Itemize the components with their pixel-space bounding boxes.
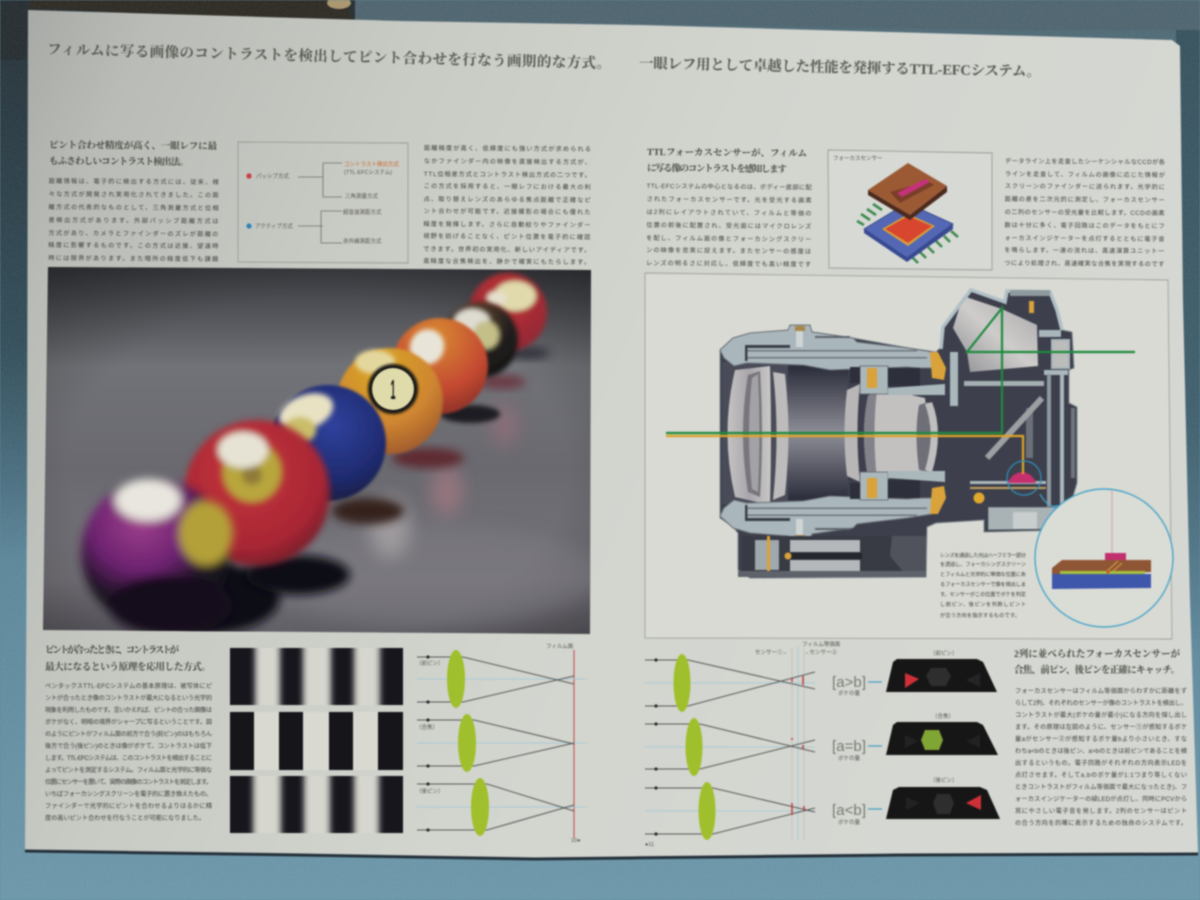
text block: lower left principle: します。TTL-EFCシステムは、このコントラストを検出することに <box>45 754 212 762</box>
chart: lens diagrams, film plane: 〔前ピン〕 <box>416 659 444 667</box>
detail connector line <box>1040 494 1074 535</box>
text block: lower right sensors: 合焦、前ピン、後ピンを正確にキャッチ。 <box>1014 664 1180 676</box>
camera and lens silhouette <box>720 290 1077 578</box>
panel: focus detection classification: コントラスト検出方式 <box>344 160 399 168</box>
caption <box>940 551 1027 619</box>
viewfinder row: back focus: [a<b] <box>832 802 866 819</box>
text block: lower left principle: いちばフォーカシングスクリーンを電子的に置き換えたもの。 <box>45 790 212 798</box>
text block: lower left principle: 現象を利用したものです。言いかえれば、ピントの合った画像は <box>45 706 212 714</box>
panel: focus sensor chip: フォーカスセンサー <box>833 155 883 162</box>
text block: lower right sensors: コントラストが最大(ボケの量が最小)になる方向を探し出し <box>1015 711 1187 719</box>
caption: が合う方向を指示するものです。 <box>940 611 1020 619</box>
text block: lower right sensors: ときコントラストがフィルム等価面で最大になったとき)、フ <box>1015 783 1187 791</box>
panel: focus sensor chip <box>828 150 992 270</box>
stripes: back focus, soft <box>229 775 404 834</box>
viewfinder row: back focus: 〔後ピン〕 <box>930 776 958 784</box>
text block: second column: TTL位相差方式とコントラスト検出方式の二つです。 <box>424 170 591 179</box>
text block: TTL focus sensor: は2列にレイアウトされていて、フィルムと等価の <box>646 208 812 217</box>
text block: lower right sensors <box>1014 648 1188 827</box>
text block: contrast detection intro: 時には限界があります。また暗所の精度低下も課題 <box>48 254 218 263</box>
caption: とフィルムと光学的に等価な位置にあ <box>940 570 1026 578</box>
text block: lower right sensors: ォーカスインジケーターの緑LEDが点灯し、同時にPCVから <box>1015 795 1187 803</box>
caption: るフォーカスセンサーで像を検出しま <box>940 580 1026 588</box>
text block: second column: 距離精度が高く、低輝度にも強い方式が求められる <box>424 144 591 153</box>
blue ball <box>270 385 386 501</box>
text block: TTL focus sensor: TTLフォーカスセンサーが、フィルム <box>647 147 807 159</box>
text block: lower right sensors: 耳にやさしい電子音を発します。2列のセンサーはピント <box>1015 807 1187 815</box>
text block: lower left principle: よってピントを測定するシステム。フィルム面と光学的に等価な <box>45 766 212 774</box>
text block: second column: 精度を発揮します。さらに自動絞りやファインダー <box>423 220 590 229</box>
black ball <box>442 302 518 378</box>
panel: focus detection classification: 三角測量方式 <box>345 192 379 200</box>
red ball <box>184 420 330 566</box>
chart: lens diagrams, two sensors: フィルム等価面 <box>802 640 841 648</box>
chart: lens diagrams, film plane: フィルム面 <box>546 643 574 650</box>
icon: brown cover chip <box>868 163 947 220</box>
text block: contrast detection intro <box>48 139 220 263</box>
text block: TTL focus sensor: 位置の前後に配置され、受光面にはマイクロレンズ <box>646 221 811 230</box>
yellow number one ball <box>337 348 443 454</box>
reflections and shadows <box>130 347 550 634</box>
text block: lower left principle: 位置にセンサーを置いて、実際の画像のコントラストを測定します。 <box>45 778 212 786</box>
icon: blue base chip with green pins <box>857 203 958 263</box>
red dot: passive <box>246 173 252 179</box>
text block: right column upper: 数は十分に多く、電子回路はこのデータをもとにフ <box>1005 221 1165 230</box>
text block: lower right sensors: フォーカスセンサーはフィルム等価面からわずかに距離をず <box>1015 687 1187 695</box>
text block: second column: ント合わせが可能です。近接撮影の場合にも優れた <box>424 207 591 216</box>
chart: lens diagrams, film plane: 〔合焦〕 <box>416 723 438 731</box>
lower lens barrel shell <box>720 471 946 541</box>
text block: second column: なかファインダー内の映像を直接検出する方式が、 <box>424 157 591 166</box>
text block: lower right sensors: 出するというもの。電子回路がそれぞれの方向表示LEDを <box>1015 759 1187 767</box>
chart: lens diagrams, film plane: 〔後ピン〕 <box>416 787 444 795</box>
text block: lower left principle: ピントが合ったときに、コントラストが <box>45 644 179 656</box>
viewfinder row: in focus: [a=b] <box>832 738 866 755</box>
chart: lens diagrams, two sensors <box>645 640 841 848</box>
upper lens barrel shell <box>720 325 946 395</box>
blue dot: active <box>246 223 252 229</box>
text block: right column upper: 距離の差を二次元的に測定し、フォーカスセンサー <box>1005 195 1165 204</box>
text block: second column: 高精度な合焦検出を、静かで確実にもたらします。 <box>423 257 590 266</box>
text block: TTL focus sensor: TTL-EFCシステムの中心となるのは、ボディー底部に配 <box>647 182 812 191</box>
magenta sensor <box>1008 472 1036 483</box>
chart: contrast stripes <box>229 647 404 834</box>
text block: TTL focus sensor: ンの映像を忠実に捉えます。またセンサーの感度は <box>646 246 811 255</box>
light path green <box>666 308 1135 433</box>
text block: right column upper: つにより処理され、高速確実な合焦を実現するのです <box>1004 259 1164 268</box>
text block: second column: 視野を妨げることなく、ピント位置を電子的に確認 <box>423 232 591 241</box>
yellow number one ball: 1 <box>390 374 396 405</box>
text block: lower right sensors: 量aがセンサー②が感知するボケ量bより小さいとき、すな <box>1015 735 1187 743</box>
light path orange <box>666 436 1023 474</box>
viewfinder row: front focus <box>832 649 997 697</box>
title <box>47 40 1041 80</box>
orange ball <box>392 318 488 414</box>
caption: を透過し、フォーカシングスクリーン <box>940 560 1026 568</box>
viewfinder row: front focus: [a>b] <box>832 674 866 691</box>
text block: right column upper: の二列のセンサーの受光量を比較します。CCDの画素 <box>1005 208 1165 217</box>
lens barrel tube <box>786 366 848 500</box>
text block: second column: 点、取り替えレンズのあらゆる焦点距離で正確なピ <box>424 195 591 204</box>
viewfinder row: front focus: 〔前ピン〕 <box>930 649 958 657</box>
text block: right column upper: を鳴らします。一連の流れは、高速演算ユニット一 <box>1004 246 1164 255</box>
viewfinder row: back focus <box>832 776 1000 826</box>
text block: contrast detection intro: 差検出方式があります。外部パッシブ距離方式は <box>48 216 219 225</box>
chart: lens diagrams, two sensors: ●11 <box>645 842 654 848</box>
viewfinder row: in focus: ボケの量 <box>838 754 861 762</box>
text block: lower right sensors: ます。その原理は左図のように、センサー①が感知するボケ <box>1015 723 1187 731</box>
text block: lower left principle: 後方で合う(後ピン)のときは像がボケて、コントラストは低下 <box>45 742 212 750</box>
text block: lower left principle: 度の高いピント合わせを行なうことが可能になりました。 <box>45 814 205 822</box>
text block: contrast detection intro: 方式があり、カメラとファインダーのズレが距離の <box>48 229 218 238</box>
chart: lens diagrams, two sensors: →センサー② <box>804 648 838 656</box>
dark objects behind the paper edges <box>0 0 1200 660</box>
text block: lower right sensors: らして2列、それぞれのセンサーが像のコントラストを検出し、 <box>1015 699 1187 707</box>
text block: lower left principle: ファインダーで光学的にピントを合わせるよりはるかに精 <box>45 802 212 810</box>
middle lens group <box>844 384 938 482</box>
text block: right column upper: スクリーンのファインダーに送られます。光学的に <box>1005 182 1165 191</box>
caption: す。センサーがこの位置でボケを判定 <box>940 590 1026 598</box>
panel: focus detection classification: (TTL-EFCシステム) <box>344 169 392 176</box>
chart: lens diagrams, two sensors: センサー①← <box>755 648 788 656</box>
text block: contrast detection intro: 離方式の代表的なものとして、三角測量方式と位相 <box>49 203 219 212</box>
text block: second column: この方式を採用すると、一眼レフにおける最大の利 <box>424 182 591 191</box>
text block: second column <box>423 144 592 266</box>
panel: focus detection classification <box>238 142 408 263</box>
viewfinder row: in focus: 〔合焦〕 <box>932 712 954 720</box>
panel: billiard balls photograph <box>40 262 600 637</box>
text block: TTL focus sensor: されたフォーカスセンサーです。光を受光する画素 <box>647 195 812 204</box>
stripes: front focus, soft <box>229 647 404 706</box>
chart: lens diagrams, film plane <box>416 643 587 844</box>
panel: focus detection classification: アクティブ方式 <box>255 222 293 230</box>
stripes: in focus, sharp <box>230 712 403 770</box>
panel: camera cross-section diagram <box>645 273 1173 639</box>
viewfinder row: back focus: ボケの量 <box>838 818 861 826</box>
front lens group <box>728 366 788 505</box>
pentaprism <box>941 290 1069 372</box>
viewfinder row: front focus: ボケの量 <box>838 689 861 697</box>
panel: focus detection classification: パッシブ方式 <box>256 172 290 180</box>
text block: right column upper: ラインを走査して、フィルムの画像に応じた情報が <box>1005 170 1166 179</box>
text block: right column upper <box>1004 157 1166 268</box>
purple ball <box>81 479 233 635</box>
caption: し前ピン、後ピンを判断しピント <box>940 600 1026 608</box>
text block: contrast detection intro: 々な方式が開発され実用化されてきました。この距 <box>49 190 219 199</box>
text block: lower left principle: 最大になるという原理を応用した方式。 <box>45 661 211 673</box>
text block: right column upper: データライン上を走査したシーケンシャルなCCDが各 <box>1005 157 1165 166</box>
chart: lens diagrams, film plane: 10● <box>571 838 580 844</box>
reflex mirror <box>987 398 1042 458</box>
caption: レンズを通過した光はハーフミラー部分 <box>940 551 1027 559</box>
title: 一眼レフ用として卓越した性能を発揮するTTL-EFCシステム。 <box>639 54 1041 80</box>
panel: focus detection classification: 超音波測距方式 <box>343 208 382 216</box>
text block: lower left principle: のようにピントがフィルム面の前方で合う(前ピン)のはもちろん <box>45 730 212 738</box>
text block: TTL focus sensor: を配し、フィルム面の像とフォーカシングスクリー <box>646 234 811 243</box>
text block: right column upper: ォーカスインジケーターを点灯するとともに電子音 <box>1004 234 1164 243</box>
text block: contrast detection intro: もふさわしいコントラスト検出法。 <box>49 155 189 168</box>
small sensor circle <box>1007 461 1041 495</box>
text block: lower right sensors: の合う方向を的確に表示するための独自のシステムです。 <box>1015 819 1187 827</box>
text block: lower right sensors: わちa<bのときは後ピン、a>bのときは前ピンであることを検 <box>1015 747 1188 755</box>
text block: second column: できます。世界初の実用化、新しいアイディアです。 <box>423 245 590 254</box>
text block: lower left principle: ボケがなく、明暗の境界がシャープに写るということです。図 <box>45 718 212 726</box>
orange dot <box>974 492 984 504</box>
far red ball <box>469 273 547 351</box>
text block: lower left principle: ペンタックスTTL-EFCシステムの基本原理は、被写体にピ <box>45 682 212 690</box>
motor housing <box>738 536 926 577</box>
text block: lower left principle: ントが合ったとき像のコントラストが最大になるという光学的 <box>45 694 212 702</box>
title: フィルムに写る画像のコントラストを検出してピント合わせを行なう画期的な方式。 <box>47 40 611 72</box>
viewfinder row: in focus <box>832 712 998 762</box>
text block: lower right sensors: 2列に並べられたフォーカスセンサーが <box>1014 648 1180 660</box>
text block: contrast detection intro: ピント合わせ精度が高く、一眼レフに最 <box>49 139 218 152</box>
panel: focus detection classification: 赤外線測距方式 <box>343 237 382 245</box>
text block: lower left principle <box>45 644 212 822</box>
text block: lower right sensors: 点灯させます。そしてa,bのボケ量が1:1つまり等しくない <box>1015 771 1187 779</box>
text block: contrast detection intro: 距離情報は、電子的に検出する方式には、従来、様 <box>49 177 220 186</box>
body interior parts <box>950 352 1075 530</box>
text block: TTL focus sensor: に写る像のコントラストを感知します <box>647 162 787 175</box>
text block: TTL focus sensor: レンズの明るさに対応し、低輝度でも高い精度です <box>646 259 811 268</box>
text block: TTL focus sensor <box>646 147 812 268</box>
enlarged circle with chip cross-section <box>1035 489 1173 627</box>
text block: contrast detection intro: 精度に影響するものです。この方式は近接、望遠時 <box>48 241 218 250</box>
